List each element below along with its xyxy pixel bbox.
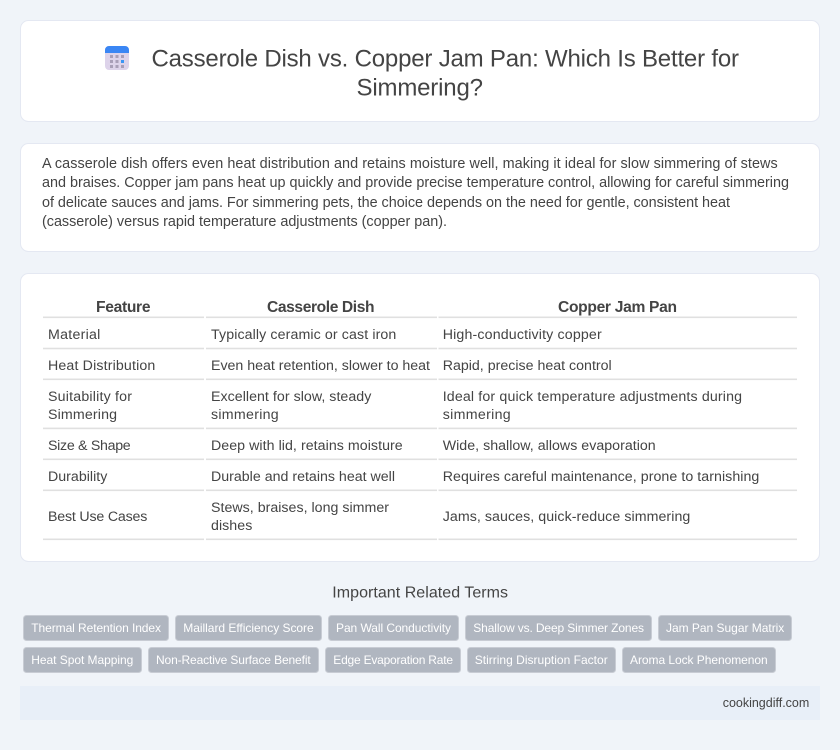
tag: Stirring Disruption Factor bbox=[475, 653, 608, 667]
footer bar bbox=[20, 686, 820, 720]
row: material bbox=[48, 327, 602, 343]
tag: Shallow vs. Deep Simmer Zones bbox=[473, 621, 644, 635]
row: durability bbox=[48, 469, 759, 485]
row: best use cases: dishes bbox=[211, 518, 252, 534]
row: suitability for simmering: Excellent for slow, steady bbox=[211, 389, 372, 405]
tag: Thermal Retention Index bbox=[31, 621, 161, 635]
footer source text: cookingdiff.com bbox=[723, 696, 809, 710]
tag: Heat Spot Mapping bbox=[31, 653, 133, 667]
intro paragraph: (casserole) versus rapid temperature adjustments (copper pan). bbox=[42, 214, 447, 230]
row: size and shape: Size & Shape bbox=[48, 438, 131, 454]
row: size and shape: Deep with lid, retains moisture bbox=[211, 438, 403, 454]
tag bbox=[622, 648, 776, 672]
intro paragraph: and braises. Copper jam pans heat up quickly and provide precise temperature control, allowing for careful simmering bbox=[42, 175, 789, 191]
title: Simmering? bbox=[356, 75, 483, 102]
tag: Non-Reactive Surface Benefit bbox=[156, 653, 311, 667]
tag: Edge Evaporation Rate bbox=[333, 653, 453, 667]
tag bbox=[326, 648, 460, 672]
row: durability: Durable and retains heat well bbox=[211, 469, 395, 485]
intro paragraph bbox=[42, 156, 789, 230]
tag: Jam Pan Sugar Matrix bbox=[666, 621, 784, 635]
row: best use cases bbox=[48, 500, 690, 534]
intro paragraph: of delicate sauces and jams. For simmering pets, the choice depends on the need for gentle, consistent heat bbox=[42, 195, 730, 211]
row: size and shape bbox=[48, 438, 656, 454]
row: material: Material bbox=[48, 327, 100, 343]
row: suitability for simmering: Suitability for bbox=[48, 389, 132, 405]
row: material: Typically ceramic or cast iron bbox=[211, 327, 396, 343]
title bbox=[152, 46, 739, 102]
row: heat distribution: Heat Distribution bbox=[48, 358, 155, 374]
table header row: Casserole Dish bbox=[267, 299, 374, 316]
title: Casserole Dish vs. Copper Jam Pan: Which Is Better for bbox=[152, 46, 739, 73]
row: size and shape: Wide, shallow, allows evaporation bbox=[443, 438, 656, 454]
tag: Maillard Efficiency Score bbox=[183, 621, 314, 635]
row: material: High-conductivity copper bbox=[443, 327, 602, 343]
table header row: Feature bbox=[96, 299, 151, 316]
intro paragraph: A casserole dish offers even heat distribution and retains moisture well, making it ideal for slow simmering of stews bbox=[42, 156, 778, 172]
tag bbox=[148, 648, 318, 672]
row: durability: Requires careful maintenance, prone to tarnishing bbox=[443, 469, 759, 485]
tag: Pan Wall Conductivity bbox=[336, 621, 451, 635]
tag bbox=[328, 616, 458, 640]
comparison table card bbox=[20, 274, 820, 562]
row: durability: Durability bbox=[48, 469, 108, 485]
icon: calendar bbox=[105, 46, 129, 70]
intro card bbox=[20, 144, 820, 252]
row: best use cases: Stews, braises, long simmer bbox=[211, 500, 389, 516]
row: best use cases: Best Use Cases bbox=[48, 509, 147, 525]
related terms heading: Important Related Terms bbox=[332, 585, 508, 602]
header card bbox=[20, 20, 820, 122]
row: best use cases: Jams, sauces, quick-reduce simmering bbox=[443, 509, 690, 525]
row: heat distribution: Rapid, precise heat control bbox=[443, 358, 612, 374]
tag bbox=[658, 616, 792, 640]
row: suitability for simmering: simmering bbox=[211, 407, 279, 423]
row: suitability for simmering: Simmering bbox=[48, 407, 117, 423]
table header row: Copper Jam Pan bbox=[558, 299, 677, 316]
related terms tags bbox=[24, 616, 792, 672]
tag bbox=[24, 648, 142, 672]
tag bbox=[468, 648, 616, 672]
row: heat distribution: Even heat retention, slower to heat bbox=[211, 358, 430, 374]
tag bbox=[176, 616, 322, 640]
row: suitability for simmering bbox=[48, 389, 742, 423]
table header row bbox=[96, 299, 677, 316]
row: heat distribution bbox=[48, 358, 612, 374]
tag: Aroma Lock Phenomenon bbox=[630, 653, 768, 667]
row: suitability for simmering: Ideal for quick temperature adjustments during bbox=[443, 389, 742, 405]
tag bbox=[466, 616, 652, 640]
row: suitability for simmering: simmering bbox=[443, 407, 511, 423]
tag bbox=[24, 616, 168, 640]
